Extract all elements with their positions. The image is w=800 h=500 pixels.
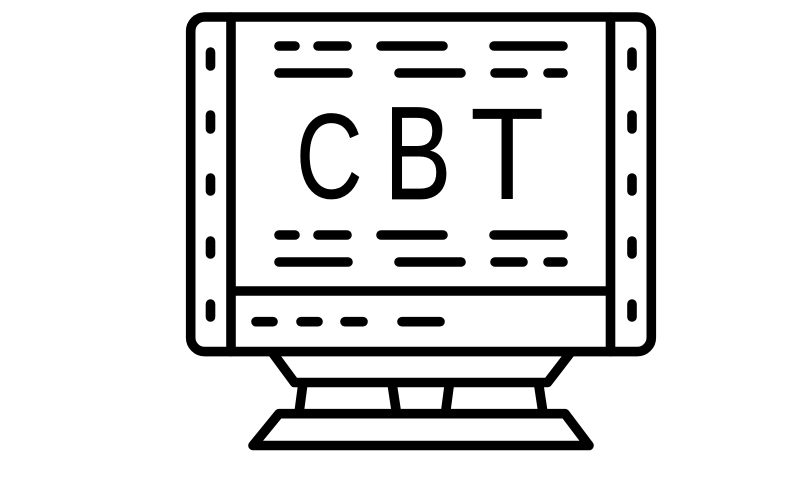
heading: CBT [296,80,544,228]
stand legs [299,383,543,413]
monitor neck [272,352,571,382]
upper text lines [279,46,563,73]
heading: CBT: B [384,80,451,228]
lower text lines [279,235,563,262]
left side dashes [206,52,215,317]
heading: CBT: C [296,89,362,224]
toolbar dashes [256,317,440,327]
heading: CBT: T [470,80,544,227]
monitor frame [191,17,651,352]
right side dashes [627,52,637,317]
base [253,414,589,446]
